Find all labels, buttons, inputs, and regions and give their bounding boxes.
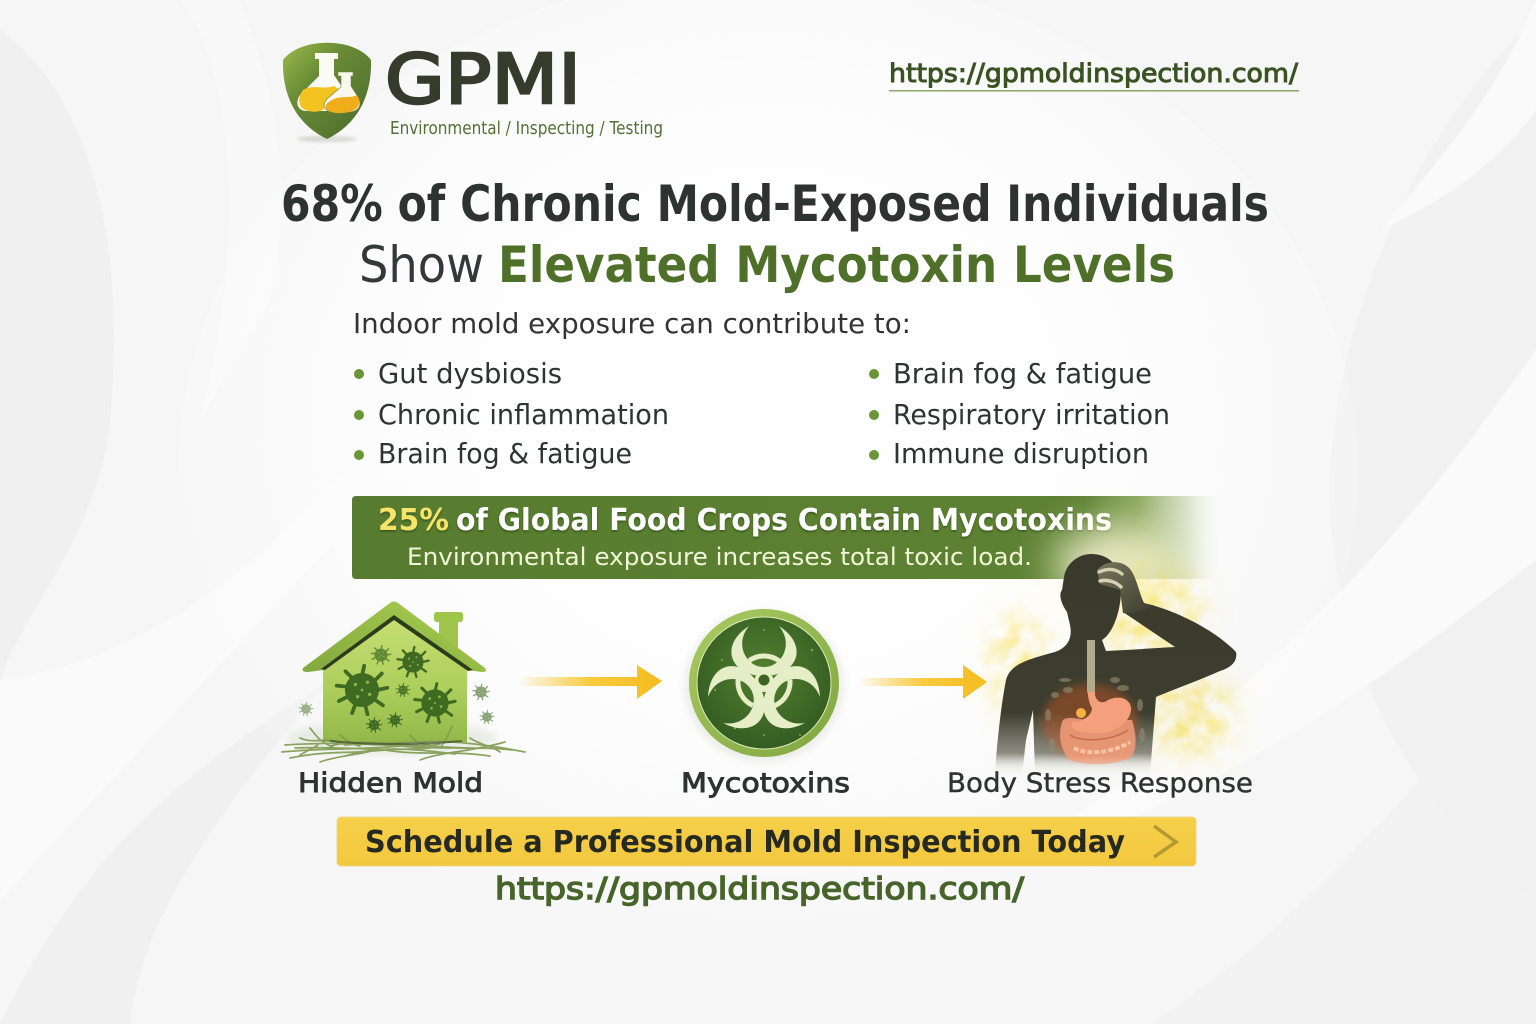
raised hand [1097,562,1152,613]
green stat banner [352,496,1225,579]
button label: Schedule a Professional Mold Inspection Today [365,825,1125,860]
title line 2: Show [359,236,484,294]
arrow: mycotoxins to body [858,665,987,699]
house walls [323,618,467,742]
arrow: mold to mycotoxins [518,665,662,699]
label: body stress response: Body Stress Response [947,768,1253,799]
banner subtext: Environmental exposure increases total toxic load. [407,543,1032,571]
label: mycotoxins: Mycotoxins [681,768,850,799]
bullet list left: Chronic inflammation [378,399,669,431]
icon: biohazard badge [684,609,844,762]
banner headline: of Global Food Crops Contain Mycotoxins [456,503,1112,538]
bullet list right [869,358,1170,470]
tagline: Environmental / Inspecting / Testing [390,118,663,139]
title line 2: Elevated Mycotoxin Levels [498,236,1175,294]
bullet list left: Gut dysbiosis [378,358,562,390]
mold roots and grass [282,726,525,762]
bullet list right: Respiratory irritation [893,399,1170,431]
icon: shield [283,43,371,139]
icon: large flask [297,53,349,111]
intestines [1060,718,1136,764]
organ speckles [1045,677,1145,752]
esophagus and stomach [1072,640,1131,733]
top website url: https://gpmoldinspection.com/ [889,59,1298,89]
icon: small flask [324,72,360,112]
banner headline stat: 25% [378,503,449,538]
call to action button [337,817,1196,866]
yellow glow [992,570,1232,755]
bullet list right: Brain fog & fatigue [893,358,1152,390]
house chimney [434,612,463,650]
icon: yellow liquid left [299,86,346,112]
house roof [303,602,486,672]
label: hidden mold: Hidden Mold [298,768,483,799]
button chevron [1154,826,1176,857]
inner glow [1042,684,1138,760]
biohazard symbol [699,626,829,738]
icon: orange liquid right [326,95,359,113]
bullet list left: Brain fog & fatigue [378,438,632,470]
logo: GPMI shield with flasks [283,43,371,142]
pale halo behind head [1053,525,1177,605]
bullet list left [354,358,669,470]
icon: moldy house [282,602,525,762]
intro text: Indoor mold exposure can contribute to: [353,307,911,340]
speckles [714,629,816,736]
mold spores inside house [299,646,494,732]
body silhouette [995,554,1236,775]
logo wordmark: GPMI [385,40,581,120]
bullet list right: Immune disruption [893,438,1149,470]
bottom website url: https://gpmoldinspection.com/ [495,872,1025,907]
icon: person with stress response [990,525,1236,776]
title line 1: 68% of Chronic Mold-Exposed Individuals [281,175,1269,233]
